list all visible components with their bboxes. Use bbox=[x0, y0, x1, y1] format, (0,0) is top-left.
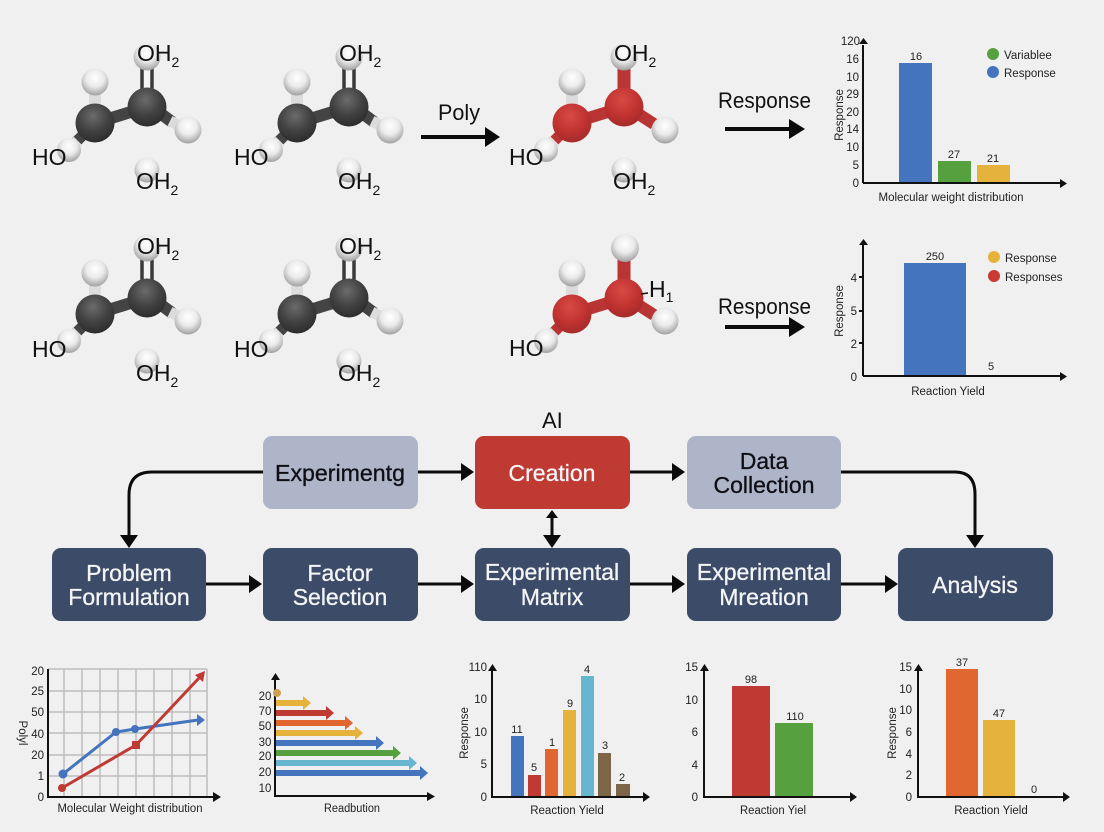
line chart: molecular weight distribution: 0 bbox=[38, 792, 44, 804]
flow box: Experimental Mreation bbox=[687, 548, 841, 621]
flow box: Experimental Matrix bbox=[475, 548, 630, 621]
bars bbox=[273, 689, 428, 780]
flow box: Problem Formulation bbox=[52, 548, 206, 621]
flow box: Problem Formulation: Formulation bbox=[68, 584, 190, 610]
molecule: row 1 red bbox=[509, 40, 678, 198]
flow box: Factor Selection: Selection bbox=[293, 584, 387, 610]
flow box: Data Collection bbox=[687, 436, 841, 509]
bar chart: reaction yield seven bars: 5 bbox=[481, 759, 487, 771]
bar chart: reaction yield seven bars: 5 bbox=[531, 762, 537, 774]
bar chart: reaction yield seven bars: 110 bbox=[469, 662, 487, 674]
flow box: Analysis: Analysis bbox=[932, 572, 1018, 598]
flow box: Experimental Mreation: Mreation bbox=[719, 584, 809, 610]
bar chart: reaction yield top: 5 bbox=[851, 306, 857, 318]
bar chart: reaction yield two bars: 6 bbox=[692, 727, 698, 739]
molecule: row 2 red: H bbox=[649, 276, 666, 302]
bar chart: molecular weight distribution: 21 bbox=[987, 153, 999, 165]
bar chart: reaction yield two bars: 10 bbox=[685, 695, 698, 707]
molecule: row 1 grey middle: HO bbox=[234, 144, 268, 170]
bar chart: reaction yield top bbox=[834, 239, 1067, 398]
flow box: Experimental Mreation: Experimental bbox=[697, 559, 831, 585]
bar chart: reaction yield seven bars: 10 bbox=[474, 727, 487, 739]
bar chart: molecular weight distribution: 10 bbox=[846, 72, 859, 84]
bar chart: reaction yield seven bars: 4 bbox=[584, 664, 590, 676]
line chart: molecular weight distribution: 1 bbox=[38, 771, 44, 783]
molecule: row 1 grey left: OH bbox=[136, 168, 170, 194]
molecule: row 1 grey middle bbox=[234, 40, 404, 198]
bar chart: reaction yield seven bars: 11 bbox=[511, 724, 523, 736]
bar chart: molecular weight distribution: 29 bbox=[846, 89, 859, 101]
legend bbox=[988, 251, 1063, 284]
flow box: Problem Formulation: Problem bbox=[86, 560, 172, 586]
bar chart: reaction yield two bars: Reaction Yiel bbox=[740, 805, 806, 817]
bar chart: molecular weight distribution: 16 bbox=[846, 54, 859, 66]
line chart: molecular weight distribution: 25 bbox=[31, 686, 44, 698]
molecule: row 2 grey middle: HO bbox=[234, 336, 268, 362]
molecule: row 2 red bbox=[509, 234, 678, 361]
bar: green bbox=[938, 161, 971, 183]
arrow: Experimental Matrix to Experimental Mreation bbox=[630, 575, 685, 593]
legend: Response bbox=[1005, 253, 1057, 265]
bar chart: reaction yield two bars: 0 bbox=[692, 792, 698, 804]
arrow bar chart: Readbution: 70 bbox=[259, 706, 271, 718]
flow box: Experimental Matrix: Matrix bbox=[521, 584, 584, 610]
bar chart: molecular weight distribution: 20 bbox=[846, 107, 859, 119]
bar chart: reaction yield orange yellow: 37 bbox=[956, 657, 968, 669]
flow box: Factor Selection bbox=[263, 548, 418, 621]
molecule: row 2 grey left: 2 bbox=[172, 247, 180, 263]
bar chart: reaction yield top: Reaction Yield bbox=[911, 386, 985, 398]
line chart: molecular weight distribution: Molecular Weight distribution bbox=[58, 803, 202, 815]
bar: blue bbox=[899, 63, 932, 183]
bar chart: reaction yield top: 250 bbox=[926, 251, 944, 263]
arrow: Factor Selection to Experimental Matrix bbox=[418, 575, 474, 593]
flow box: Data Collection: Collection bbox=[714, 472, 814, 498]
bar chart: reaction yield seven bars: 1 bbox=[549, 737, 555, 749]
bar chart: reaction yield seven bars bbox=[459, 662, 650, 817]
flow box: Factor Selection: Factor bbox=[307, 560, 373, 586]
bar chart: molecular weight distribution: 16 bbox=[910, 51, 922, 63]
arrow: Creation to Experimental Matrix double bbox=[543, 510, 561, 548]
arrow bar chart: Readbution: 10 bbox=[259, 783, 271, 795]
molecule: row 1 grey left: OH bbox=[137, 40, 172, 66]
bar chart: reaction yield seven bars: 9 bbox=[567, 698, 573, 710]
bar chart: reaction yield orange yellow: Response bbox=[887, 707, 899, 759]
bar chart: reaction yield top: 0 bbox=[851, 372, 857, 384]
bar chart: molecular weight distribution: 0 bbox=[853, 178, 859, 190]
molecule: row 1 grey middle: OH bbox=[338, 168, 372, 194]
bar chart: molecular weight distribution: Molecular weight distribution bbox=[878, 192, 1024, 204]
molecule: row 1 red: OH bbox=[613, 168, 648, 194]
line chart: molecular weight distribution: 40 bbox=[31, 729, 44, 741]
molecule: row 2 grey middle: 2 bbox=[372, 374, 380, 390]
bar chart: reaction yield top: 2 bbox=[851, 339, 857, 351]
arrow: Poly bbox=[421, 100, 500, 147]
bar chart: molecular weight distribution: 5 bbox=[853, 160, 859, 172]
arrow bar chart: Readbution: Readbution bbox=[324, 803, 380, 815]
arrow: Poly: Poly bbox=[438, 100, 480, 125]
molecule: row 2 grey middle: 2 bbox=[374, 247, 382, 263]
bar chart: reaction yield seven bars: Response bbox=[459, 707, 471, 759]
bar chart: reaction yield seven bars: 10 bbox=[474, 694, 487, 706]
bar chart: molecular weight distribution bbox=[834, 36, 1067, 204]
bar: yellow bbox=[977, 165, 1010, 183]
legend bbox=[987, 48, 1056, 80]
molecule: row 1 grey middle: 2 bbox=[374, 54, 382, 70]
series: red bbox=[58, 671, 205, 792]
arrow bar chart: Readbution: 50 bbox=[259, 721, 271, 733]
flow box: Experimental Matrix: Experimental bbox=[485, 559, 619, 585]
arrow bar chart: Readbution: 20 bbox=[259, 767, 271, 779]
arrow: Response row 1 bbox=[718, 88, 811, 139]
line chart: molecular weight distribution: Polyl bbox=[16, 721, 28, 745]
bar chart: reaction yield seven bars: Reaction Yield bbox=[530, 805, 604, 817]
bar chart: molecular weight distribution: 10 bbox=[846, 142, 859, 154]
flow box: Data Collection: Data bbox=[740, 448, 788, 474]
arrow: Response row 2 bbox=[718, 294, 811, 337]
arrow bar chart: Readbution bbox=[259, 673, 435, 815]
bar chart: reaction yield top: 5 bbox=[988, 361, 994, 373]
arrow: Experimenting to Creation bbox=[418, 463, 474, 481]
molecule: row 2 grey left bbox=[32, 233, 202, 390]
molecule: row 1 red: 2 bbox=[648, 54, 656, 70]
bar chart: reaction yield two bars bbox=[685, 662, 857, 817]
molecule: row 2 grey left: OH bbox=[137, 233, 172, 259]
bar chart: reaction yield top: 4 bbox=[851, 273, 858, 285]
bar chart: molecular weight distribution: 120 bbox=[841, 36, 860, 48]
molecule: row 1 red: HO bbox=[509, 144, 544, 170]
molecule: row 2 red: HO bbox=[509, 335, 544, 361]
flow box: Creation bbox=[475, 436, 630, 509]
bar chart: reaction yield orange yellow: 10 bbox=[899, 684, 912, 696]
arrow bar chart: Readbution: 30 bbox=[259, 737, 271, 749]
molecule: row 2 grey left: 2 bbox=[170, 374, 178, 390]
arrow: Creation to Data Collection bbox=[630, 463, 685, 481]
molecule: row 1 grey left: 2 bbox=[172, 54, 180, 70]
molecule: row 2 grey left: OH bbox=[136, 360, 170, 386]
molecule: row 1 grey middle: OH bbox=[339, 40, 374, 66]
molecule: row 1 grey left: 2 bbox=[170, 182, 178, 198]
bar chart: reaction yield orange yellow: Reaction Yield bbox=[954, 805, 1028, 817]
line chart: molecular weight distribution: 20 bbox=[31, 750, 44, 762]
molecule: row 1 red: OH bbox=[614, 40, 648, 66]
bar chart: reaction yield orange yellow: 0 bbox=[906, 792, 912, 804]
molecule: row 2 grey middle: OH bbox=[338, 360, 372, 386]
line chart: molecular weight distribution: 20 bbox=[31, 666, 44, 678]
molecule: row 1 grey left bbox=[32, 40, 202, 198]
arrow bar chart: Readbution: 20 bbox=[259, 691, 271, 703]
molecule: row 2 red: 1 bbox=[666, 289, 674, 305]
molecule: row 2 grey middle bbox=[234, 233, 404, 390]
molecule: row 2 grey left: HO bbox=[32, 336, 66, 362]
bar chart: reaction yield orange yellow: 15 bbox=[899, 662, 912, 674]
molecule: row 1 grey middle: 2 bbox=[372, 182, 380, 198]
bar chart: reaction yield orange yellow: 47 bbox=[993, 708, 1005, 720]
arrow: Problem Formulation to Factor Selection bbox=[206, 575, 262, 593]
arrow bar chart: Readbution: 20 bbox=[259, 751, 271, 763]
connector: Data Collection to Analysis bbox=[841, 472, 984, 548]
bar chart: reaction yield orange yellow: 4 bbox=[906, 749, 913, 761]
molecule: row 1 red: 2 bbox=[648, 182, 656, 198]
connector: Experimenting to Problem Formulation bbox=[120, 472, 263, 548]
arrow: Response row 1: Response bbox=[718, 88, 811, 113]
flow box: Analysis bbox=[898, 548, 1053, 621]
legend: Variablee bbox=[1004, 50, 1052, 62]
molecule: row 2 grey middle: OH bbox=[339, 233, 374, 259]
legend: Response bbox=[1004, 68, 1056, 80]
bar chart: reaction yield orange yellow: 6 bbox=[906, 727, 912, 739]
line chart: molecular weight distribution bbox=[16, 666, 221, 815]
bar chart: molecular weight distribution: 27 bbox=[948, 149, 960, 161]
line chart: molecular weight distribution: 50 bbox=[31, 707, 44, 719]
arrow: Experimental Mreation to Analysis bbox=[841, 575, 898, 593]
bar chart: reaction yield two bars: 15 bbox=[685, 662, 698, 674]
bar chart: reaction yield top: Response bbox=[834, 285, 846, 337]
bar chart: reaction yield orange yellow: 2 bbox=[906, 770, 912, 782]
bar chart: molecular weight distribution: 14 bbox=[846, 124, 860, 136]
bar chart: reaction yield seven bars: 2 bbox=[619, 772, 625, 784]
flow box: Experimenting bbox=[263, 436, 418, 509]
bar chart: reaction yield seven bars: 3 bbox=[602, 740, 608, 752]
flow box: Experimenting: Experimentg bbox=[275, 460, 405, 486]
bar chart: reaction yield two bars: 4 bbox=[692, 760, 699, 772]
flow box: Creation: Creation bbox=[509, 460, 595, 486]
bar chart: reaction yield orange yellow bbox=[887, 657, 1070, 817]
bar chart: reaction yield two bars: 110 bbox=[786, 711, 804, 723]
molecule: row 1 grey left: HO bbox=[32, 144, 66, 170]
bar chart: molecular weight distribution: Response bbox=[834, 89, 846, 141]
bar chart: reaction yield two bars: 98 bbox=[745, 674, 757, 686]
bar chart: reaction yield orange yellow: 0 bbox=[1031, 784, 1037, 796]
bar chart: reaction yield seven bars: 0 bbox=[481, 792, 487, 804]
label: AI: AI bbox=[542, 408, 563, 433]
arrow: Response row 2: Response bbox=[718, 294, 811, 319]
bar: blue bbox=[904, 263, 966, 376]
legend: Responses bbox=[1005, 272, 1063, 284]
bar chart: reaction yield orange yellow: 10 bbox=[899, 705, 912, 717]
series: blue bbox=[58, 714, 205, 778]
